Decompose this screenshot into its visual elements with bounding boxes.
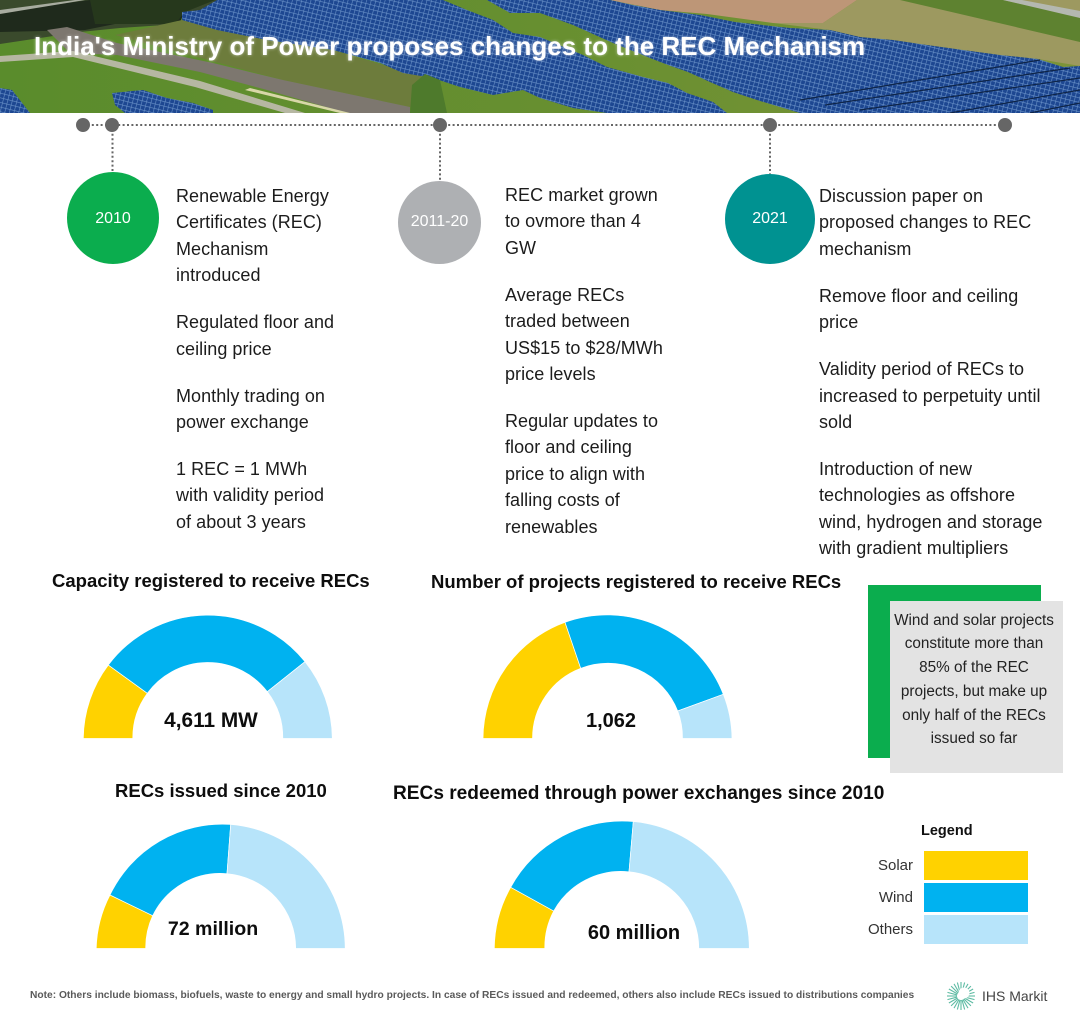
text column: 2010 [176, 186, 334, 532]
text column: 2011-20: REC market grown [505, 185, 658, 205]
legend label: solar: Solar [878, 857, 913, 874]
text column: 2010: ceiling price [176, 339, 272, 359]
legend swatch: wind [924, 883, 1028, 912]
legend [868, 823, 1028, 944]
text column: 2010: Regulated floor and [176, 312, 334, 332]
text column: 2010: Certificates (REC) [176, 212, 322, 232]
heading: projects: Number of projects registered to receive RECs [431, 571, 841, 592]
text column: 2021: price [819, 312, 858, 332]
heading: RECs redeemed: RECs redeemed through power exchanges since 2010 [393, 783, 884, 804]
callout text box: Wind and solar projects [894, 612, 1054, 628]
text column: 2011-20: GW [505, 238, 536, 258]
callout green backing [868, 585, 1041, 758]
text column: 2011-20 [505, 185, 663, 537]
text column: 2021: wind, hydrogen and storage [819, 512, 1042, 532]
year marker: 2010: 2010 [95, 210, 131, 227]
text column: 2021: mechanism [819, 239, 911, 259]
year marker: 2011-20: 2011-20 [411, 213, 468, 230]
logo wordmark: IHS Markit [982, 988, 1047, 1004]
legend label: others: Others [868, 921, 913, 938]
text column: 2010: of about 3 years [176, 512, 306, 532]
callout text box: issued so far [931, 730, 1017, 747]
text column: 2021: sold [819, 412, 852, 432]
text column: 2010: Renewable Energy [176, 186, 329, 206]
text column: 2010: introduced [176, 265, 261, 285]
legend label: wind: Wind [879, 889, 913, 906]
footnote: Note: Others include biomass, biofuels, waste to energy and small hydro projects. In case of RECs issued and redeemed, others also include RECs issued to distributions companies [30, 990, 914, 1001]
value: capacity: 4,611 MW [164, 709, 258, 732]
text column: 2021: increased to perpetuity until [819, 386, 1041, 406]
year marker: 2021: 2021 [752, 210, 788, 227]
text column: 2021: with gradient multipliers [819, 538, 1008, 558]
text column: 2011-20: traded between [505, 311, 630, 331]
year marker: 2021 [725, 174, 815, 264]
text column: 2011-20: falling costs of [505, 490, 620, 510]
text column: 2011-20: floor and ceiling [505, 437, 632, 457]
text column: 2011-20: Regular updates to [505, 411, 658, 431]
text column: 2010: Mechanism [176, 239, 268, 259]
text column: 2011-20: to ovmore than 4 [505, 211, 641, 231]
text column: 2010: with validity period [176, 485, 324, 505]
text column: 2021: technologies as offshore [819, 485, 1015, 505]
text column: 2021: Remove floor and ceiling [819, 286, 1018, 306]
year marker: 2011-20 [398, 181, 481, 264]
callout text box [890, 601, 1063, 773]
text column: 2011-20: price levels [505, 364, 596, 384]
heading: RECs issued: RECs issued since 2010 [115, 780, 327, 801]
header photo: solar farm [0, 0, 1080, 113]
text column: 2021: Introduction of new [819, 459, 972, 479]
text column: 2011-20: renewables [505, 517, 598, 537]
text column: 2021: proposed changes to REC [819, 212, 1031, 232]
text column: 2021: Validity period of RECs to [819, 359, 1024, 379]
legend swatch: solar [924, 851, 1028, 880]
callout text box: only half of the RECs [902, 707, 1046, 724]
text column: 2011-20: US$15 to $28/MWh [505, 338, 663, 358]
value: projects: 1,062 [586, 710, 636, 732]
legend title: Legend [921, 823, 973, 839]
legend swatch: others [924, 915, 1028, 944]
text column: 2010: Monthly trading on [176, 386, 325, 406]
text column: 2010: power exchange [176, 412, 309, 432]
title: India's Ministry of Power proposes changes to the REC Mechanism [34, 31, 865, 61]
timeline with dotted connectors [76, 118, 1012, 180]
text column: 2021: Discussion paper on [819, 186, 983, 206]
year marker: 2010 [67, 172, 159, 264]
text column: 2010: 1 REC = 1 MWh [176, 459, 307, 479]
text column: 2021 [819, 186, 1042, 558]
callout text box: 85% of the REC [919, 659, 1029, 676]
text column: 2011-20: Average RECs [505, 285, 624, 305]
value: RECs redeemed: 60 million [588, 922, 680, 944]
callout text box: constitute more than [905, 635, 1043, 652]
text column: 2011-20: price to align with [505, 464, 645, 484]
value: RECs issued: 72 million [168, 918, 258, 940]
callout: wind and solar [868, 585, 1063, 773]
heading: capacity: Capacity registered to receive RECs [52, 570, 370, 591]
callout text box: projects, but make up [901, 683, 1047, 700]
